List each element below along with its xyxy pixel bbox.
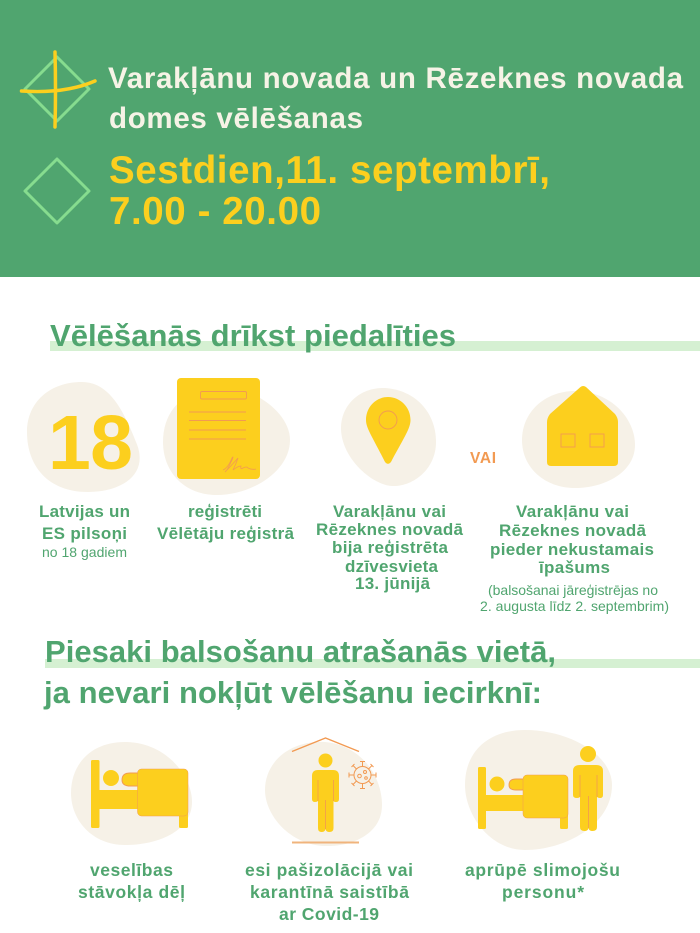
label: citizens: ES pilsoņi	[42, 524, 127, 543]
title: Varakļānu novada un Rēzeknes novada	[108, 62, 684, 95]
item: caregiving	[465, 730, 620, 902]
label: property text: (balsošanai jāreģistrējas no	[488, 582, 658, 598]
item: voter register	[157, 378, 295, 543]
label: residence text: Rēzeknes novadā	[316, 520, 464, 539]
label: residence text	[316, 502, 464, 593]
label: property text: pieder nekustamais	[490, 540, 654, 559]
item: age 18	[27, 382, 140, 560]
item: health	[71, 742, 192, 902]
icon: house on blob	[522, 386, 635, 488]
icon: bed and standing person on blob	[465, 730, 612, 850]
icon: bed on blob	[71, 742, 192, 845]
label: property text: 2. augusta līdz 2. septembrim)	[480, 598, 669, 614]
label: residence text: 13. jūnijā	[355, 574, 431, 593]
label: registered: Vēlētāju reģistrā	[157, 524, 295, 543]
label: citizens	[39, 502, 130, 560]
label: registered: reģistrēti	[188, 502, 262, 521]
label: property text: Varakļānu vai	[516, 502, 629, 521]
label: quarantine: ar Covid-19	[279, 904, 379, 924]
icon: empty diamond	[25, 159, 89, 223]
icon: ballot diamond with cross	[22, 52, 95, 127]
item: property	[480, 386, 669, 614]
label: health: veselības	[90, 860, 173, 880]
label: citizens: no 18 gadiem	[42, 544, 127, 560]
heading: who may vote: Vēlēšanās drīkst piedalīties	[50, 318, 456, 353]
label: quarantine: esi pašizolācijā vai	[245, 860, 413, 880]
heading: apply for voting at location: ja nevari nokļūt vēlēšanu iecirknī:	[43, 675, 542, 710]
title	[108, 62, 684, 135]
label: residence text: dzīvesvieta	[345, 557, 439, 576]
icon: number 18 on blob	[27, 382, 140, 492]
label: residence text: bija reģistrēta	[332, 538, 449, 557]
icon: map pin on blob	[341, 388, 436, 486]
label: residence text: Varakļānu vai	[333, 502, 446, 521]
title: domes vēlēšanas	[109, 102, 363, 135]
label: health: stāvokļa dēļ	[78, 882, 185, 902]
label: citizens: Latvijas un	[39, 502, 130, 521]
icon: person, virus and shelter on blob	[265, 738, 382, 846]
label: property text: īpašums	[538, 558, 610, 577]
label: property text: Rēzeknes novadā	[499, 521, 647, 540]
date and time	[109, 149, 550, 233]
label: health	[78, 860, 185, 902]
label: caregiving: personu*	[502, 882, 584, 902]
label: caregiving	[465, 860, 620, 902]
label: registered	[157, 502, 295, 543]
panel: header	[0, 0, 700, 277]
icon: document on blob	[163, 378, 290, 495]
item: residence	[316, 388, 464, 593]
label: quarantine: karantīnā saistībā	[250, 882, 409, 902]
item: quarantine	[245, 738, 413, 924]
label: caregiving: aprūpē slimojošu	[465, 860, 620, 880]
label: property text	[480, 502, 669, 614]
date and time: 7.00 - 20.00	[109, 190, 321, 233]
icon: number 18 on blob: 18	[48, 400, 133, 486]
heading: who may vote	[50, 318, 700, 353]
label: or: VAI	[470, 450, 496, 467]
heading: apply for voting at location: Piesaki balsošanu atrašanās vietā,	[45, 634, 556, 669]
date and time: Sestdien,11. septembrī,	[109, 149, 550, 192]
label: quarantine	[245, 860, 413, 924]
heading: apply for voting at location	[43, 634, 700, 710]
